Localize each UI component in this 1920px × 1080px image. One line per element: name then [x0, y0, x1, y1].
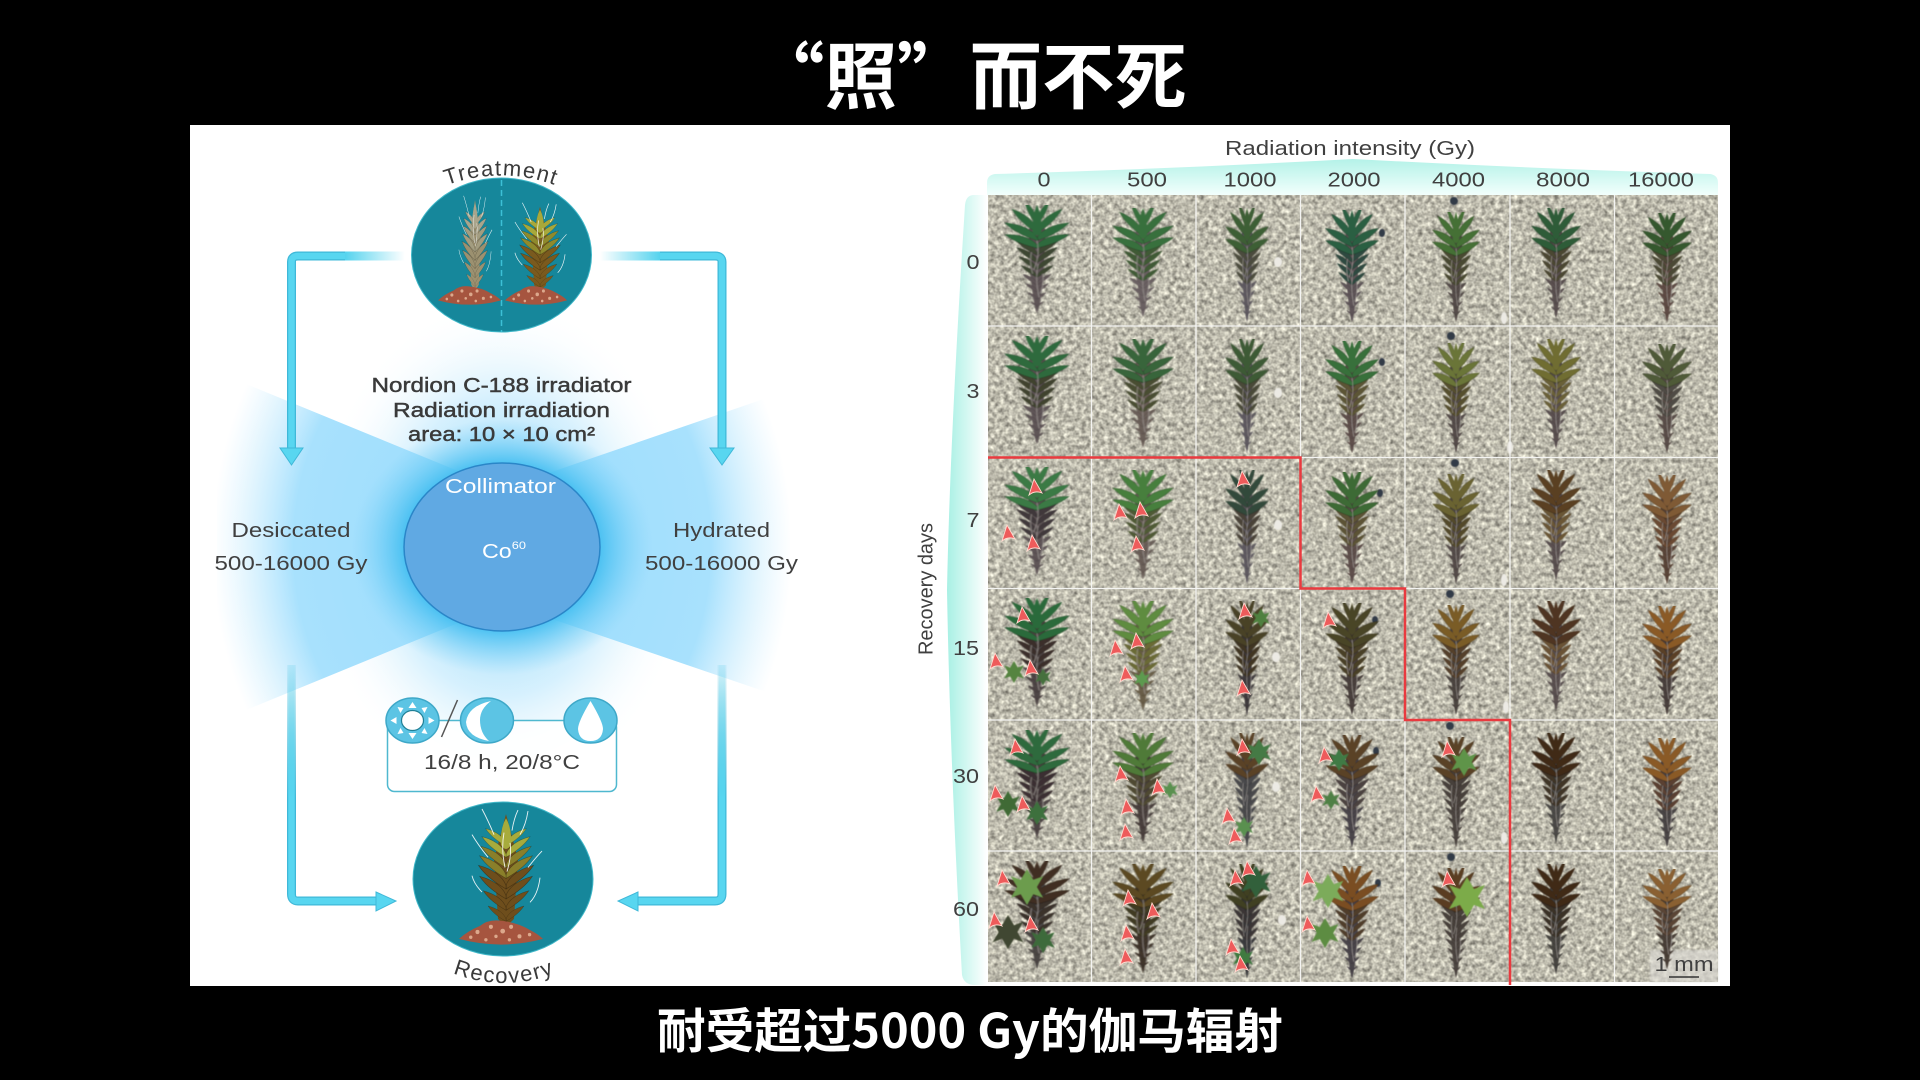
label: desiccated: [214, 520, 368, 575]
label: hydrated: Hydrated: [673, 520, 770, 542]
column labels: 4000: [1432, 170, 1485, 192]
panel: irradiation experiment schematic: [214, 161, 798, 984]
collimator circle: [404, 463, 600, 631]
culture conditions box: 16/8 h, 20/8°C: [424, 752, 580, 774]
label: desiccated: 500-16000 Gy: [214, 553, 368, 575]
new shoot markers: 30 days: [990, 739, 1455, 844]
sand background: [988, 195, 1718, 982]
column labels: 1000: [1224, 170, 1276, 192]
irradiator description: Radiation irradiation: [393, 400, 610, 422]
new shoot markers: 7 days: [1002, 471, 1250, 552]
moss row: 7 days: [1004, 463, 1692, 584]
icon: moon: [460, 698, 514, 743]
label: treatment: Treatment: [442, 161, 558, 185]
subtitle: 耐受超过5000 Gy的伽马辐射: [657, 992, 1283, 1062]
row labels: [953, 252, 980, 921]
label: desiccated: Desiccated: [232, 520, 350, 542]
column labels: 2000: [1328, 170, 1380, 192]
culture conditions box: [386, 698, 617, 792]
title: “照”而不死: [752, 19, 1187, 124]
irradiator description: [372, 375, 632, 446]
column labels: 8000: [1536, 170, 1590, 192]
radiation glow: [217, 297, 790, 797]
recovery circle: [413, 802, 593, 956]
grid lines: [988, 195, 1718, 982]
panel: radiation recovery photo matrix: [916, 138, 1718, 985]
icon: water drop: [564, 698, 617, 743]
label: treatment: [442, 161, 558, 185]
moss row: 15 days: [1004, 594, 1692, 715]
axis title: recovery days: Recovery days: [916, 523, 938, 655]
column labels: 500: [1127, 170, 1167, 192]
column labels: 16000: [1628, 170, 1694, 192]
treatment circle: [412, 178, 592, 332]
red survival threshold line: [988, 458, 1510, 985]
arrow: hydrated to recovery: [618, 665, 722, 911]
arrow: treatment to desiccated: [280, 251, 410, 465]
arrow: treatment to hydrated: [595, 251, 734, 465]
moss row: 60 days: [1004, 857, 1692, 978]
row labels: 3: [966, 381, 980, 403]
moss row: 3 days: [1004, 332, 1692, 453]
icon: slash: [442, 700, 458, 737]
collimator circle: Collimator: [445, 476, 556, 498]
panel: white figure background: [190, 125, 1730, 986]
row labels: 30: [953, 766, 979, 788]
new shoot markers: 60 days: [989, 861, 1455, 972]
column labels: [1038, 170, 1694, 192]
collimator circle: 60: [512, 540, 526, 552]
label: recovery: Recovery: [454, 960, 550, 984]
new shoot markers: 15 days: [990, 603, 1336, 696]
irradiator description: area: 10 × 10 cm²: [408, 424, 595, 446]
row labels: 7: [966, 510, 980, 532]
axis title: radiation intensity: Radiation intensity (Gy): [1225, 138, 1475, 160]
row labels: 15: [953, 638, 979, 660]
scale bar: 1 mm: [1654, 954, 1714, 976]
arrow: desiccated to recovery: [292, 665, 396, 911]
label: recovery: [454, 960, 550, 984]
column labels: 0: [1038, 170, 1050, 192]
label: hydrated: 500-16000 Gy: [645, 553, 798, 575]
label: hydrated: [645, 520, 798, 575]
icon: sun: [386, 698, 439, 743]
new green shoots: [993, 608, 1485, 969]
moss row: 0 days: [1004, 201, 1692, 322]
row labels: 60: [953, 899, 979, 921]
column axis band: [987, 159, 1718, 195]
collimator circle: Co: [482, 541, 508, 563]
row labels: 0: [966, 252, 980, 274]
row axis band: [947, 195, 987, 985]
moss row: 30 days: [1004, 726, 1692, 847]
irradiator description: Nordion C-188 irradiator: [372, 375, 632, 397]
